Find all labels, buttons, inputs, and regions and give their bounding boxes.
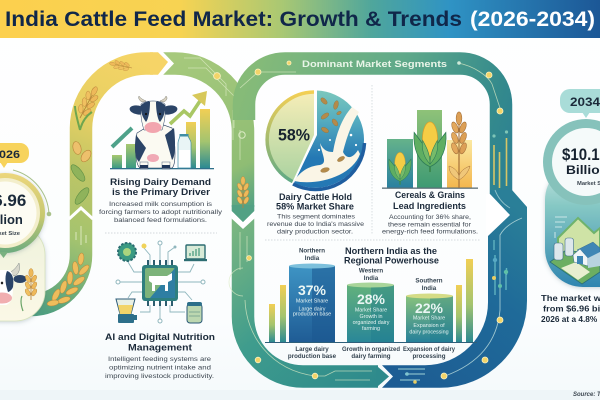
pie chart: 58 percent	[266, 90, 364, 190]
2034 label pill: 2034	[570, 95, 600, 109]
heading: is the Primary Driver	[112, 187, 211, 197]
heading: Lead Ingredients	[393, 201, 466, 211]
body text	[105, 356, 214, 380]
flow band: green circuit path	[150, 52, 245, 207]
icon: cow with growth chart	[110, 91, 214, 169]
thin progress arc	[13, 170, 49, 214]
icon: cow and wheat	[0, 263, 38, 311]
cylinder: northern india: Large dairy	[299, 306, 326, 312]
heading	[105, 332, 215, 352]
white chevron gap on right band	[486, 194, 510, 236]
band label: dominant market segments: Dominant Market Segments	[302, 59, 447, 69]
cylinder: western india	[347, 268, 394, 342]
heading: Cereals & Grains	[395, 190, 465, 200]
decorative growth bars	[269, 259, 473, 342]
body text: This segment dominates	[277, 214, 356, 220]
body text: improving livestock productivity.	[105, 373, 214, 380]
cylinder: southern india	[406, 278, 453, 342]
2026 label pill	[0, 143, 29, 168]
panel: AI and digital nutrition	[105, 241, 215, 380]
panel: rising dairy demand	[99, 91, 223, 224]
heading	[393, 190, 466, 211]
cylinder: western india: organized dairy	[353, 320, 390, 326]
icon: farm with growth line	[550, 217, 600, 284]
cylinder captions: processing	[412, 353, 446, 360]
title banner: (2026-2034)	[470, 8, 595, 31]
heading: Northern India as the	[345, 246, 437, 256]
panel: cereals and grains	[382, 110, 478, 236]
panel: 2034 market size	[541, 89, 600, 324]
footer strip	[0, 390, 600, 400]
cylinder: northern india: 37%	[298, 282, 327, 298]
cylinder captions: Growth in organized	[342, 346, 400, 353]
cylinder: western india: India	[364, 275, 379, 282]
cylinder captions: Expansion of dairy	[403, 346, 456, 353]
body text: Increased milk consumption is	[109, 201, 213, 208]
heading: AI and Digital Nutrition	[105, 332, 215, 342]
cylinder: northern india: Northern	[299, 248, 325, 254]
cylinder: western india: Growth in	[359, 314, 383, 320]
body text: these remain essential for	[388, 222, 472, 228]
body text: energy-rich feed formulations.	[382, 228, 478, 236]
cylinder: southern india: 22%	[415, 300, 444, 316]
cylinder: southern india: Southern	[415, 278, 443, 284]
flow band: lower teal path	[229, 177, 389, 388]
heading	[110, 177, 211, 197]
body text: balanced feed formulations.	[114, 217, 207, 224]
title banner: India Cattle Feed Market: Growth & Trends	[5, 8, 462, 31]
heading: Rising Dairy Demand	[110, 177, 211, 187]
2034 label pill	[560, 89, 600, 118]
body text: Intelligent feeding systems are	[108, 356, 211, 363]
cylinder: northern india: Market Share	[296, 298, 328, 304]
cylinder: southern india: Market Share	[413, 316, 445, 322]
cylinder: northern india: production base	[293, 312, 331, 318]
body text	[99, 201, 223, 224]
flow band: top teal segment	[240, 61, 508, 205]
heading: Dairy Cattle Hold	[279, 192, 352, 202]
body text: Accounting for 36% share,	[389, 214, 471, 221]
cylinder: western india: 28%	[357, 291, 386, 307]
heading: Management	[128, 342, 192, 352]
icon: AI chip with cow	[116, 241, 207, 323]
pie chart: 58 percent: 58%	[278, 126, 310, 144]
heading: Regional Powerhouse	[344, 256, 439, 266]
flow band: blue path to 2034	[382, 190, 527, 388]
body text: revenue due to India's massive	[267, 221, 364, 228]
cylinder captions: production base	[288, 353, 337, 360]
body text: forcing farmers to adopt nutritionally	[99, 209, 223, 216]
cylinder: southern india: dairy processing	[409, 330, 449, 336]
conclusion text	[541, 293, 600, 324]
flow band: gold wheat path	[31, 52, 168, 307]
body text: dairy production sector.	[277, 228, 353, 236]
panel: 2026 market size	[0, 143, 51, 321]
cylinder captions: Large dairy	[295, 346, 329, 353]
panel: regional powerhouse	[265, 246, 477, 360]
cylinder: western india: Market Share	[355, 308, 387, 314]
panel: dairy cattle share	[266, 90, 364, 236]
cylinder: western india: Western	[359, 268, 383, 274]
cylinder captions	[288, 346, 456, 360]
body text	[382, 214, 478, 236]
cylinder: northern india	[289, 248, 335, 342]
cylinder: southern india: Expansion of	[413, 323, 445, 329]
cylinder captions: dairy farming	[351, 353, 391, 360]
heading	[344, 246, 439, 266]
chart: cereal bars	[382, 110, 478, 189]
title banner	[0, 0, 600, 38]
cylinder: southern india: India	[422, 285, 437, 292]
cylinder: northern india: India	[305, 255, 320, 262]
heading: 58% Market Share	[276, 202, 354, 212]
cylinder: western india: farming	[362, 326, 380, 332]
heading	[276, 192, 354, 212]
body text: optimizing nutrient intake and	[109, 364, 211, 372]
body text	[267, 214, 364, 236]
